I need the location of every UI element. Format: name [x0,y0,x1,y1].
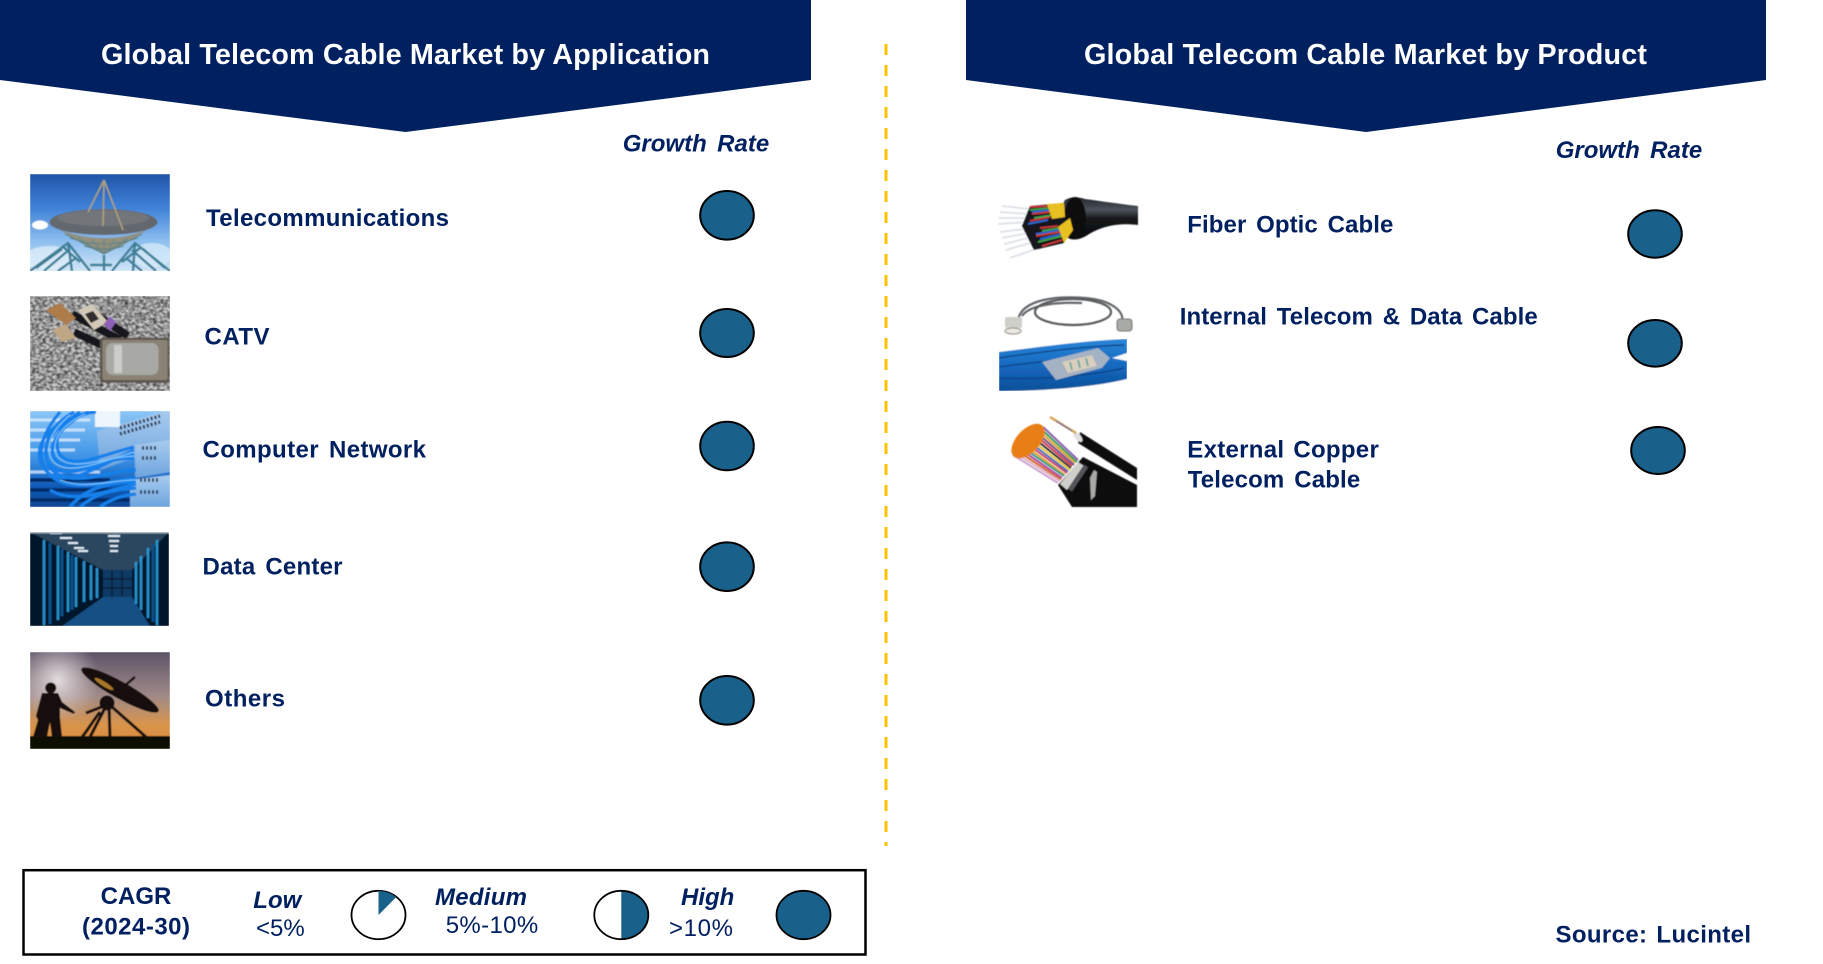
legend high label [669,884,734,942]
legend low label [253,887,305,942]
image: coaxial cables and tv [30,296,170,391]
legend low label: <5% [256,915,305,942]
header: by application [0,0,811,132]
title: by application: Global Telecom Cable Market by Application [101,39,710,71]
rating: data center high [700,542,754,591]
growth rate heading: application: Growth Rate [623,131,769,158]
label: external copper telecom cable: Telecom Cable [1188,466,1360,493]
legend medium pie [594,891,648,939]
label: external copper telecom cable [1187,437,1379,493]
rating: external copper telecom cable high [1631,427,1685,474]
legend low label: Low [253,887,303,914]
image: silhouette with satellite dish [30,652,170,749]
image: data center corridor [30,532,169,626]
rating: catv high [700,309,754,357]
image: satellite dish [24,174,172,271]
rating: computer network high [700,422,754,470]
image: blue ethernet cable [999,339,1127,391]
rating: others high [700,676,754,725]
image: external copper cable [1005,417,1137,507]
label: others: Others [205,686,285,713]
rating: fiber optic cable high [1628,210,1682,258]
legend title [82,883,190,940]
legend title: (2024-30) [82,914,190,940]
label: computer network: Computer Network [202,436,427,463]
label: data center: Data Center [202,554,342,581]
legend medium label: 5%-10% [446,912,538,939]
legend title: CAGR [101,883,171,910]
label: internal telecom and data cable: Internal Telecom & Data Cable [1180,304,1538,331]
label: catv: CATV [204,323,270,350]
rating: internal telecom and data cable high [1628,320,1682,367]
legend high pie [776,891,830,939]
legend medium label [435,884,538,939]
legend medium label: Medium [435,884,527,911]
legend high label: >10% [669,915,733,942]
title: by product: Global Telecom Cable Market by Product [1084,39,1647,71]
rating: telecommunications high [700,191,754,240]
source note: Source: Lucintel [1556,922,1751,948]
legend high label: High [681,884,734,911]
growth rate heading: product: Growth Rate [1556,137,1702,164]
image: network cables and server [30,411,170,507]
panel: application rows [16,131,769,749]
label: telecommunications: Telecommunications [206,205,449,232]
label: fiber optic cable: Fiber Optic Cable [1187,212,1393,239]
legend low pie [352,891,406,939]
image: fiber optic cable [998,197,1138,258]
label: external copper telecom cable: External Copper [1187,437,1379,464]
legend: cagr [24,870,866,954]
header: by product [966,0,1766,132]
panel: product rows [998,137,1702,507]
image: coaxial and ethernet cables [1005,297,1132,334]
